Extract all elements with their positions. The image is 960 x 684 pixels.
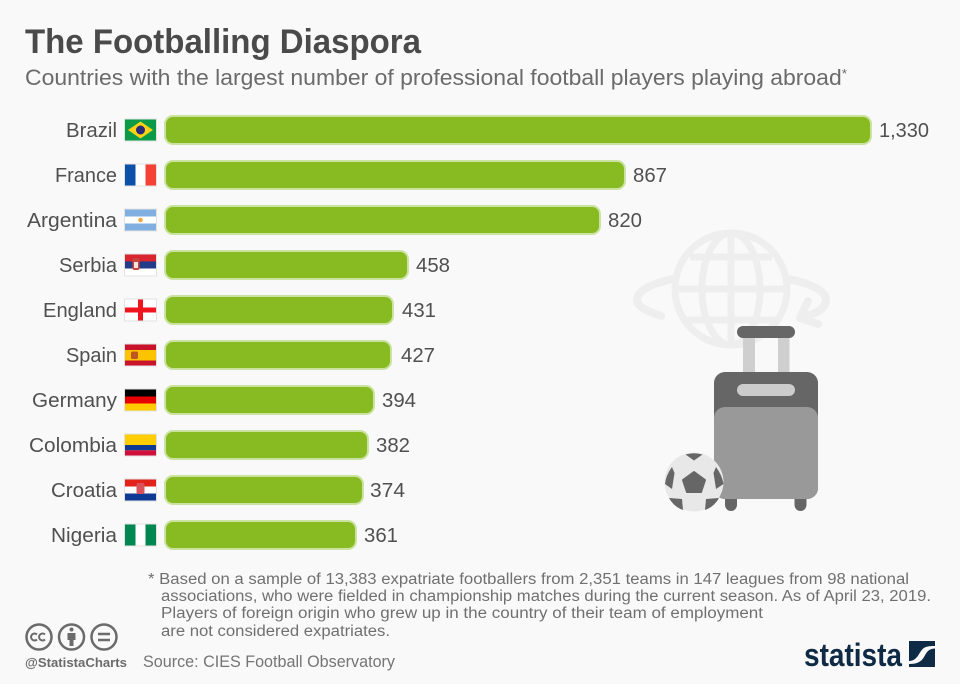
flag: Colombia: [124, 434, 156, 456]
row: England: [43, 296, 436, 324]
bar: Croatia: [165, 476, 363, 504]
footnote: are not considered expatriates.: [161, 623, 390, 640]
icon: globe with orbit arrow: [637, 233, 826, 345]
row: Croatia: [51, 476, 405, 504]
bar: Nigeria: [165, 521, 356, 549]
footnote: [148, 571, 931, 640]
row: Colombia: Colombia: [29, 434, 118, 457]
row: Brazil: Brazil: [66, 119, 117, 142]
row: Argentina: [27, 206, 642, 234]
flag: Croatia: [124, 479, 156, 501]
value: Croatia: 374: [370, 479, 405, 502]
row: Spain: Spain: [66, 344, 117, 367]
bar: Germany: [165, 386, 374, 414]
value: England: 431: [402, 299, 436, 322]
row: Nigeria: Nigeria: [51, 524, 118, 547]
icon: suitcase: [714, 326, 818, 511]
flag: Argentina: [124, 209, 156, 231]
row: Nigeria: [51, 521, 398, 549]
row: Serbia: Serbia: [59, 254, 118, 277]
flag: Nigeria: [124, 524, 156, 546]
footnote: * Based on a sample of 13,383 expatriate footballers from 2,351 teams in 147 leagues from 98 national: [148, 571, 909, 588]
icon: football: [664, 452, 724, 512]
row: England: England: [43, 299, 117, 322]
bar: Serbia: [165, 251, 408, 279]
flag: Germany: [124, 389, 156, 411]
row: Germany: [32, 386, 416, 414]
value: Serbia: 458: [416, 254, 450, 277]
value: Argentina: 820: [608, 209, 642, 232]
footnote: associations, who were fielded in championship matches during the current season. As of April 23, 2019.: [161, 588, 931, 605]
title: The Footballing Diaspora: [25, 23, 422, 61]
value: Colombia: 382: [376, 434, 410, 457]
bar chart: [27, 116, 929, 549]
row: Brazil: [66, 116, 929, 144]
flag: Spain: [124, 344, 156, 366]
flag: Serbia: [124, 254, 156, 276]
row: Colombia: [29, 431, 410, 459]
subtitle: *: [842, 66, 847, 81]
row: Spain: [66, 341, 435, 369]
bar: Brazil: [165, 116, 871, 144]
bar: Argentina: [165, 206, 600, 234]
value: France: 867: [633, 164, 667, 187]
bar: England: [165, 296, 393, 324]
social handle: @StatistaCharts: [25, 656, 127, 670]
icon: creative commons licence: [26, 624, 116, 650]
subtitle: Countries with the largest number of professional football players playing abroad: [25, 65, 808, 90]
row: Croatia: Croatia: [51, 479, 118, 502]
row: Argentina: Argentina: [27, 209, 118, 232]
bar: Colombia: [165, 431, 368, 459]
bar: Spain: [165, 341, 391, 369]
bar: France: [165, 161, 625, 189]
value: Spain: 427: [401, 344, 435, 367]
value: Nigeria: 361: [364, 524, 398, 547]
value: Germany: 394: [382, 389, 416, 412]
flag: England: [124, 299, 156, 321]
flag: France: [124, 164, 156, 186]
logo: statista wordmark: statista: [804, 637, 902, 673]
value: Brazil: 1,330: [879, 119, 929, 142]
row: Serbia: [59, 251, 450, 279]
row: Germany: Germany: [32, 389, 118, 412]
row: France: [55, 161, 667, 189]
flag: Brazil: [124, 119, 156, 141]
footnote: Players of foreign origin who grew up in the country of their team of employment: [161, 605, 764, 622]
source: Source: CIES Football Observatory: [143, 653, 396, 671]
logo: statista mark: [909, 641, 935, 667]
row: France: France: [55, 164, 117, 187]
